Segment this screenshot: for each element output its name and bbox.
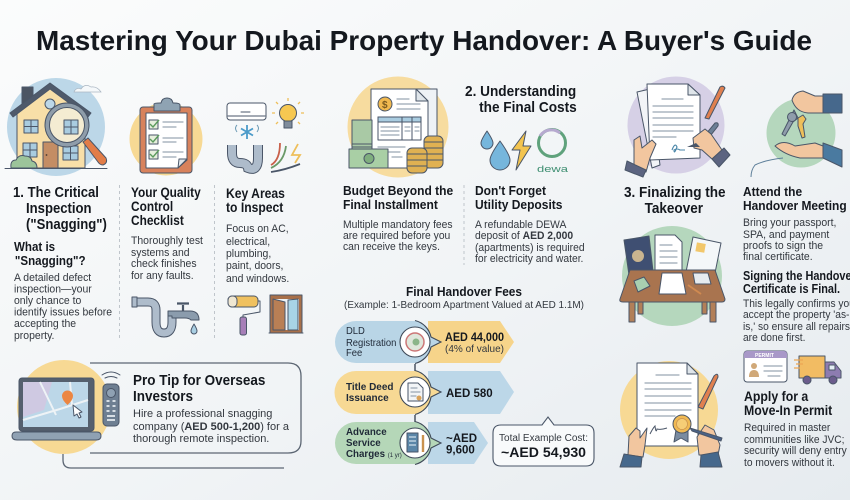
text: key areas description: plumbing, bbox=[226, 248, 271, 260]
text: permit description: to movers without it. bbox=[744, 457, 835, 469]
icon: lightning bolt bbox=[512, 131, 531, 170]
icon: signed certificate with seal bbox=[620, 361, 722, 467]
heading: signing the certificate: Certificate is Final. bbox=[743, 281, 840, 296]
row: title deed issuance: Issuance bbox=[346, 393, 389, 404]
text: signing description: are done first. bbox=[743, 332, 805, 344]
text: fees example subtitle: (Example: 1-Bedroom Apartment Valued at AED 1.1M) bbox=[344, 299, 584, 311]
icon: permit card: PERMIT bbox=[755, 353, 774, 359]
text: permit description: Required in master bbox=[744, 422, 831, 434]
text: budget description: Multiple mandatory fees bbox=[343, 219, 453, 231]
panel: pro tip for overseas investors bbox=[12, 360, 301, 468]
icon: passport and papers on table bbox=[620, 226, 725, 326]
row: advance service charges: Service bbox=[346, 438, 381, 449]
icon: remote with wireless signal bbox=[102, 372, 120, 426]
icon: pipe and faucet bbox=[132, 297, 199, 334]
text: deposits description: A refundable DEWA bbox=[475, 219, 567, 231]
text: deposits description: (apartments) is required bbox=[475, 242, 585, 254]
text: permit description: security will deny entry bbox=[744, 445, 847, 457]
row: dld registration fee: Registration bbox=[346, 338, 396, 349]
icon: dewa ring logo: dewa bbox=[537, 164, 568, 174]
heading: understanding the final costs: the Final Costs bbox=[479, 99, 577, 115]
text: checklist description: Thoroughly test bbox=[131, 235, 203, 247]
title: Mastering Your Dubai Property Handover: A Buyer's Guide bbox=[36, 25, 812, 56]
text: snagging definition: A detailed defect bbox=[14, 272, 91, 284]
icon: door and window bbox=[269, 295, 303, 333]
text: signing description: is,' so ensure all repairs bbox=[743, 321, 850, 333]
text: deposits description: deposit of AED 2,000 bbox=[475, 230, 573, 242]
text: checklist description: for any faults. bbox=[131, 270, 194, 282]
row: dld registration fee: DLD bbox=[346, 326, 365, 337]
row: dld registration fee bbox=[335, 320, 514, 364]
heading: finalizing the takeover: Takeover bbox=[645, 200, 704, 216]
text: permit description: communities like JVC; bbox=[744, 434, 845, 446]
panel: quality control checklist bbox=[130, 98, 203, 334]
row: dld registration fee: (4% of value) bbox=[445, 343, 504, 355]
text: key areas description: Focus on AC, bbox=[226, 223, 289, 235]
row: dld registration fee: Fee bbox=[346, 348, 363, 359]
text: key areas description: electrical, bbox=[226, 236, 270, 248]
text: snagging definition: property. bbox=[14, 330, 54, 342]
heading: move-in permit: Apply for a bbox=[744, 388, 809, 404]
icon: laptop with map bbox=[12, 360, 111, 454]
text: key areas description: paint, doors, bbox=[226, 260, 283, 272]
heading: what is snagging: "Snagging"? bbox=[15, 253, 86, 268]
icon: house under magnifying glass bbox=[5, 78, 107, 176]
icon: clipboard checklist bbox=[130, 98, 202, 176]
heading: what is snagging: What is bbox=[14, 239, 55, 254]
icon: dewa ring logo bbox=[537, 130, 568, 174]
text: signing description: accept the property 'as- bbox=[743, 309, 850, 321]
text: budget description: are required before you bbox=[343, 230, 450, 242]
text: key areas description: and windows. bbox=[226, 273, 289, 285]
text: meeting description: proofs to sign the bbox=[743, 240, 823, 252]
heading: move-in permit: Move-In Permit bbox=[744, 402, 833, 418]
text: checklist description: check finishes bbox=[131, 258, 197, 270]
heading: utility deposits: Don't Forget bbox=[475, 184, 547, 198]
heading: the critical inspection: ("Snagging") bbox=[26, 215, 107, 232]
callout: total example cost: ~AED 54,930 bbox=[501, 444, 586, 460]
callout frame bbox=[63, 363, 301, 468]
row: advance service charges bbox=[335, 415, 488, 464]
panel: finalizing the takeover bbox=[620, 76, 850, 469]
heading: attend the handover meeting: Attend the bbox=[743, 185, 802, 199]
heading: the critical inspection: 1. The Critical bbox=[13, 183, 99, 200]
text: snagging definition: inspection—your bbox=[14, 283, 92, 296]
icon: moving truck bbox=[794, 356, 841, 384]
panel: understanding the final costs bbox=[343, 76, 585, 265]
heading: understanding the final costs: 2. Understanding bbox=[465, 83, 576, 99]
icon: light bulb bbox=[272, 98, 304, 128]
text: checklist description: systems and bbox=[131, 247, 190, 259]
panel: critical inspection bbox=[5, 78, 112, 342]
icon: paint roller bbox=[228, 296, 260, 335]
icon: signing a document bbox=[625, 76, 730, 177]
text: meeting description: SPA, and payment bbox=[743, 229, 829, 241]
heading: pro tip: Investors bbox=[133, 388, 193, 404]
row: title deed issuance bbox=[334, 364, 514, 414]
callout: total example cost bbox=[493, 417, 594, 466]
heading: quality control checklist: Your Quality bbox=[131, 184, 201, 200]
row: title deed issuance: Title Deed bbox=[346, 382, 393, 393]
icon: bills, cash and coins bbox=[348, 76, 448, 178]
heading: quality control checklist: Control bbox=[131, 198, 173, 214]
heading: quality control checklist: Checklist bbox=[131, 212, 184, 228]
heading: budget beyond the final installment: Budget Beyond the bbox=[343, 184, 453, 198]
text: budget description: can receive the keys. bbox=[343, 241, 440, 253]
icon: water drops bbox=[481, 131, 510, 170]
heading: attend the handover meeting: Handover Meeting bbox=[743, 199, 847, 213]
heading: final handover fees: Final Handover Fees bbox=[406, 284, 522, 299]
text: snagging definition: accepting the bbox=[14, 318, 76, 330]
row: dld registration fee: AED 44,000 bbox=[445, 332, 504, 344]
icon: keys handed over bbox=[751, 91, 842, 177]
heading: the critical inspection: Inspection bbox=[26, 199, 92, 216]
icon: air conditioner and snowflake bbox=[227, 103, 266, 139]
row: advance service charges: Advance bbox=[346, 427, 387, 438]
text: pro tip description: thorough remote inspection. bbox=[133, 433, 269, 445]
text: snagging definition: only chance to bbox=[14, 295, 81, 307]
icon: permit card bbox=[744, 351, 787, 382]
callout: total example cost: Total Example Cost: bbox=[499, 433, 588, 444]
heading: key areas: Key Areas bbox=[226, 185, 285, 201]
panel: key areas to inspect bbox=[226, 98, 304, 335]
row: advance service charges: Charges (1 yr) bbox=[346, 449, 402, 460]
heading: budget beyond the final installment: Final Installment bbox=[343, 198, 439, 212]
heading: pro tip: Pro Tip for Overseas bbox=[133, 372, 266, 388]
row: advance service charges: ~AED bbox=[446, 433, 477, 445]
text: meeting description: final certificate. bbox=[743, 251, 813, 263]
icon: bills, cash and coins: $ bbox=[382, 100, 388, 111]
text: deposits description: for electricity and water. bbox=[475, 253, 583, 265]
icon: electrical wires bbox=[271, 143, 300, 172]
text: pro tip description: company (AED 500-1,200) for a bbox=[133, 421, 289, 433]
text: meeting description: Bring your passport, bbox=[743, 217, 836, 229]
heading: finalizing the takeover: 3. Finalizing the bbox=[624, 184, 726, 200]
heading: utility deposits: Utility Deposits bbox=[475, 198, 563, 212]
icon: drain pipe bbox=[232, 145, 258, 169]
panel: final handover fees bbox=[334, 284, 594, 466]
text: pro tip description: Hire a professional snagging bbox=[133, 408, 272, 420]
heading: key areas: to Inspect bbox=[226, 199, 284, 215]
row: advance service charges: 9,600 bbox=[446, 444, 475, 456]
text: snagging definition: identify issues before bbox=[14, 306, 112, 319]
row: title deed issuance: AED 580 bbox=[446, 388, 493, 400]
